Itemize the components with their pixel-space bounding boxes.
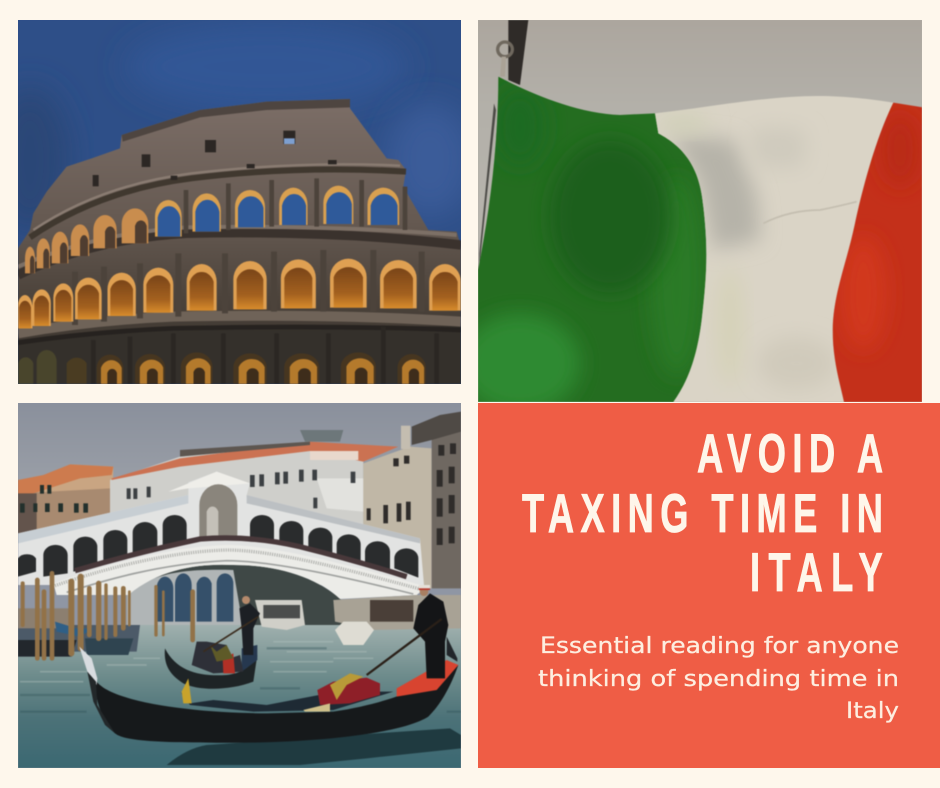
sky	[18, 403, 461, 536]
heading: TAXING TIME IN	[522, 482, 883, 544]
wall background	[478, 20, 922, 402]
crowd on bridge	[75, 538, 407, 577]
foreground gondola	[79, 585, 458, 743]
subheading: Italy	[846, 699, 899, 724]
flag: green band	[478, 76, 707, 402]
middle tier arches	[18, 259, 461, 328]
panel: title block	[478, 403, 940, 768]
flag pole and ring	[479, 20, 528, 267]
upper tier arches	[25, 186, 399, 273]
left orange buildings	[18, 464, 113, 542]
central palace	[110, 430, 398, 562]
boat interior	[180, 692, 393, 712]
foreground gondola reflection	[167, 728, 461, 765]
right buildings	[363, 412, 461, 588]
flag: white band	[653, 93, 897, 403]
bridge balustrade	[53, 545, 427, 599]
moored boats and pilings	[18, 573, 193, 658]
flag: red band	[830, 100, 923, 403]
heading: AVOID A	[697, 422, 883, 484]
Rialto Bridge	[18, 472, 427, 628]
photo: Rialto Bridge and gondolas, Venice	[18, 403, 461, 768]
photo: Colosseum at dusk	[18, 20, 461, 384]
vaporetto boats	[255, 595, 461, 645]
subheading	[538, 634, 899, 724]
bridge underside	[127, 565, 343, 628]
red cushion	[317, 678, 380, 705]
small windows	[93, 131, 337, 186]
subheading: Essential reading for anyone	[540, 634, 899, 659]
gondola prow	[79, 647, 97, 685]
pilasters	[75, 178, 437, 384]
distant gondola with gondolier	[165, 596, 260, 689]
heading: ITALY	[750, 541, 883, 603]
gondolier	[413, 593, 448, 678]
lower tier arches	[18, 350, 426, 384]
water	[18, 625, 461, 768]
sky	[0, 20, 473, 384]
photo: Italian flag	[478, 20, 922, 402]
heading	[522, 422, 883, 603]
subheading: thinking of spending time in	[538, 667, 899, 692]
red platform	[397, 660, 458, 697]
amphitheatre wall	[18, 99, 461, 384]
